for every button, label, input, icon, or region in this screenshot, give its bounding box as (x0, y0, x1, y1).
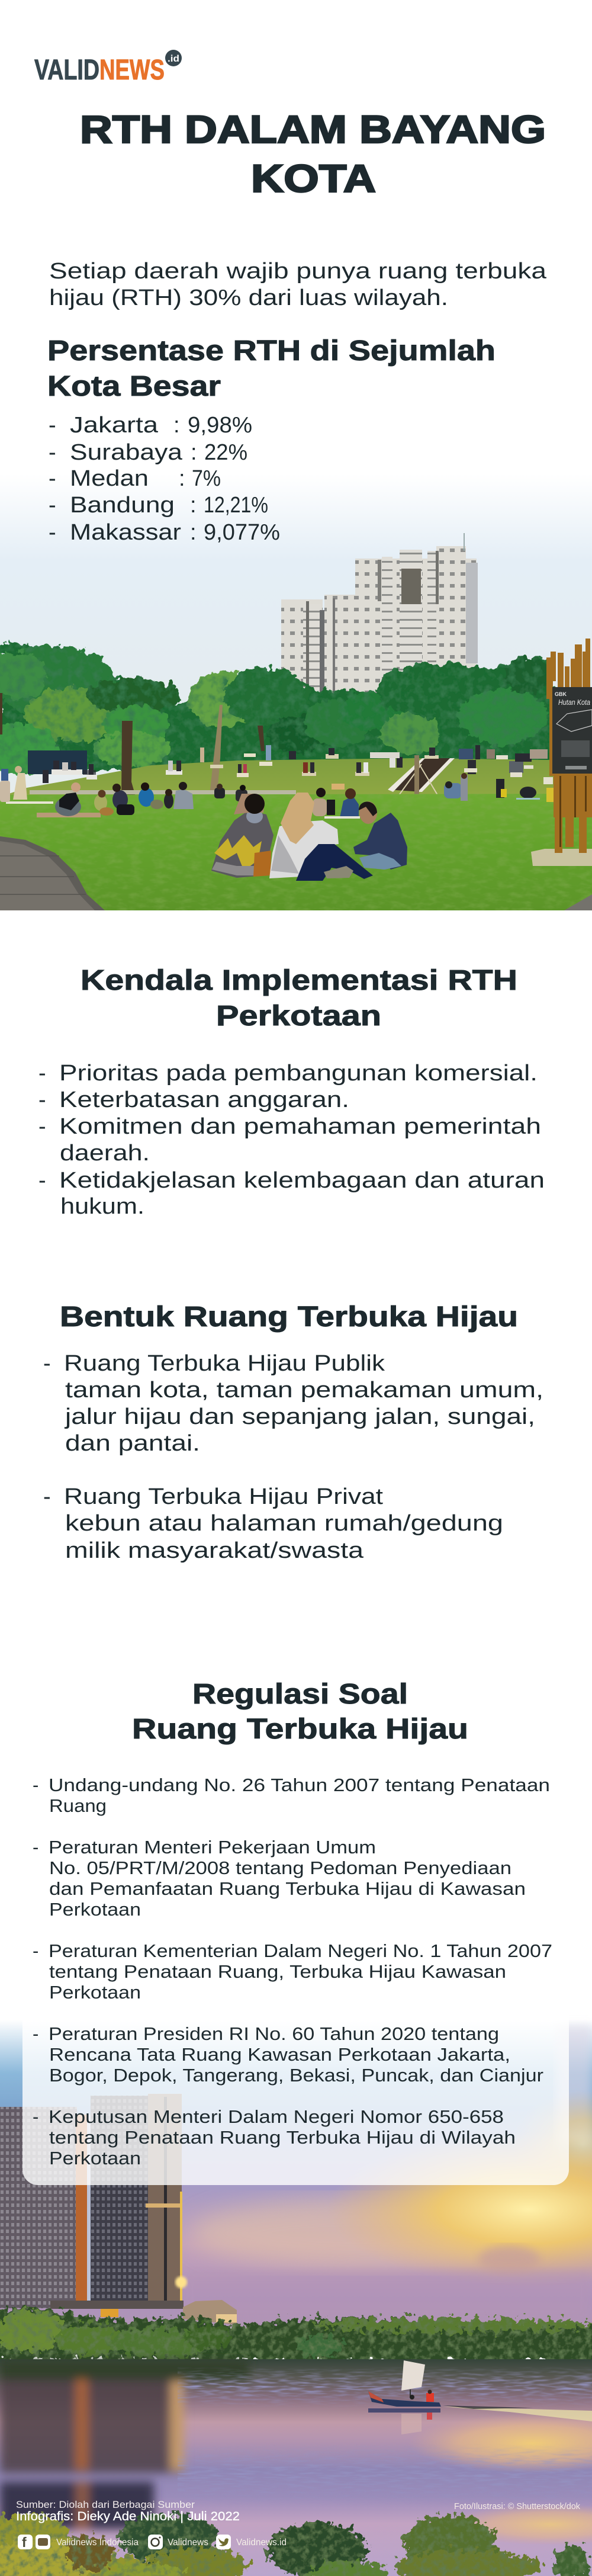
logo: Validnews.id: VALID (34, 54, 99, 86)
heading: kendala implementasi (81, 965, 517, 1032)
paved path (0, 836, 592, 910)
list: persentase RTH per kota: Jakarta (70, 413, 159, 438)
logo: Validnews.id (34, 50, 182, 86)
list: kendala: Komitmen dan pemahaman pemerintah (59, 1114, 541, 1139)
list: kendala: daerah. (60, 1141, 150, 1166)
list: bentuk RTH: milik masyarakat/swasta (65, 1538, 364, 1563)
regulation 2 (33, 1837, 526, 1920)
regulation 5 (33, 2106, 516, 2168)
source credit: Sumber: Diolah dari Berbagai Sumber (16, 2499, 195, 2510)
list: persentase RTH per kota: 9,077% (204, 520, 280, 545)
heading: kendala implementasi: Kendala Implementasi RTH (81, 965, 517, 996)
tree trunks (0, 693, 265, 803)
list: persentase RTH per kota: 7% (192, 466, 221, 491)
photo credit: Foto/Ilustrasi: © Shutterstock/dok (454, 2501, 580, 2511)
regulation 2: Peraturan Menteri Pekerjaan Umum (49, 1837, 376, 1858)
picnic group middle (313, 788, 360, 819)
city towers (281, 533, 478, 701)
list: persentase RTH per kota: : (191, 440, 197, 465)
heading: bentuk RTH: Bentuk Ruang Terbuka Hijau (60, 1301, 518, 1333)
twin towers (0, 2094, 237, 2325)
man in hoodie (353, 801, 407, 870)
people on lawn far (332, 773, 554, 802)
list: persentase RTH per kota: : (190, 493, 197, 518)
tower reflections (0, 2360, 249, 2529)
regulation 2: No. 05/PRT/M/2008 tentang Pedoman Penyediaan (49, 1858, 511, 1878)
regulation 5: Perkotaan (49, 2148, 141, 2168)
photo: sunset lake with towers (0, 2020, 592, 2576)
icon: twitter (216, 2535, 231, 2549)
heading: regulasi: Ruang Terbuka Hijau (132, 1714, 468, 1745)
regulation 4: - (33, 2023, 38, 2044)
list: kendala: - (38, 1114, 46, 1139)
lake water (0, 2359, 592, 2576)
grassy hill (0, 758, 559, 797)
title (80, 107, 546, 200)
woman in batik (211, 794, 274, 878)
logo: Validnews.id: .id (168, 54, 179, 64)
icon: instagram (148, 2535, 163, 2549)
infographic credit: Infografis: Dieky Ade Ninoki | Juli 2022 (16, 2510, 240, 2523)
icon: youtube (36, 2535, 50, 2549)
list: persentase RTH per kota: - (49, 493, 56, 518)
water glare (178, 2366, 592, 2545)
list: kendala: - (38, 1087, 46, 1112)
list: persentase RTH per kota: - (49, 413, 56, 438)
sunset sky (0, 2020, 592, 2328)
dark pavilion (28, 750, 87, 774)
panel: regulasi list (22, 1753, 569, 2185)
woman in hijab (269, 793, 373, 881)
regulation 2: Perkotaan (49, 1899, 141, 1920)
heading: persentase RTH: Persentase RTH di Sejumlah (47, 335, 496, 367)
regulation 3 (33, 1940, 552, 2003)
icon: facebook (18, 2535, 33, 2550)
regulation 1 (33, 1775, 550, 1816)
wooden sign board: GBK (555, 691, 567, 697)
heading: persentase RTH: Kota Besar (47, 371, 221, 402)
list: persentase RTH per kota: : (179, 466, 185, 491)
list: persentase RTH per kota: - (49, 466, 56, 491)
list: persentase RTH per kota: - (49, 440, 56, 465)
regulation 3: tentang Penataan Ruang, Terbuka Hijau Kawasan (49, 1961, 506, 1982)
regulation 3: Peraturan Kementerian Dalam Negeri No. 1 Tahun 2007 (49, 1940, 552, 1961)
list: bentuk RTH: Ruang Terbuka Hijau Privat (64, 1484, 384, 1509)
regulation 3: - (33, 1940, 38, 1961)
mangrove treeline (0, 2308, 592, 2363)
three seated people foreground (211, 793, 407, 881)
logo: Validnews.id: NEWS (99, 54, 165, 86)
list: bentuk RTH (43, 1351, 543, 1563)
intro text: hijau (RTH) 30% dari luas wilayah. (49, 285, 448, 310)
label: Validnews.id: Validnews.id (236, 2537, 287, 2548)
regulation 4: Rencana Tata Ruang Kawasan Perkotaan Jakarta, (49, 2044, 510, 2065)
list: kendala: - (38, 1168, 46, 1193)
regulation 2: dan Pemanfaatan Ruang Terbuka Hijau di Kawasan (49, 1878, 526, 1899)
title: KOTA (251, 156, 376, 200)
list: bentuk RTH: taman kota, taman pemakaman umum, (65, 1378, 543, 1403)
list: kendala: hukum. (60, 1194, 144, 1219)
social media row (18, 2535, 287, 2550)
regulation 1: Undang-undang No. 26 Tahun 2007 tentang Penataan (49, 1775, 550, 1795)
list: persentase RTH per kota: Medan (70, 466, 149, 491)
regulation 4: Peraturan Presiden RI No. 60 Tahun 2020 tentang (49, 2023, 499, 2044)
regulation 2: - (33, 1837, 38, 1858)
regulation 3: Perkotaan (49, 1982, 141, 2003)
foreground foliage (0, 2511, 589, 2576)
list: bentuk RTH: Ruang Terbuka Hijau Publik (64, 1351, 385, 1376)
list: persentase RTH per kota: Surabaya (70, 440, 183, 465)
list: kendala: - (38, 1061, 46, 1086)
heading: regulasi: Regulasi Soal (192, 1679, 408, 1710)
list: bentuk RTH: kebun atau halaman rumah/gedung (65, 1511, 503, 1536)
trees background (0, 641, 556, 774)
regulation 5: tentang Penataan Ruang Terbuka Hijau di Wilayah (49, 2127, 516, 2148)
lawn (0, 794, 592, 910)
wooden sign board (531, 639, 592, 866)
regulation 4 (33, 2023, 543, 2086)
list: persentase RTH per kota: : (173, 413, 180, 438)
list: persentase RTH per kota: - (49, 520, 56, 545)
photo: park with high-rise towers (0, 474, 592, 910)
picnic group left (0, 766, 247, 817)
list: bentuk RTH: - (43, 1484, 51, 1509)
regulation 5: Keputusan Menteri Dalam Negeri Nomor 650-658 (49, 2106, 504, 2127)
regulation 5: - (33, 2106, 38, 2127)
list: kendala (38, 1061, 545, 1219)
heading: regulasi (132, 1679, 468, 1745)
icon: facebook: f (22, 2535, 27, 2550)
intro text: Setiap daerah wajib punya ruang terbuka (49, 259, 547, 284)
regulation 4: Bogor, Depok, Tangerang, Bekasi, Puncak, dan Cianjur (49, 2065, 543, 2086)
regulation 1: Ruang (49, 1795, 107, 1816)
list: persentase RTH per kota: 22% (204, 440, 247, 465)
regulation 1: - (33, 1775, 38, 1795)
walkway strip (30, 790, 296, 794)
boat with sail (368, 2360, 592, 2434)
list: persentase RTH per kota (49, 413, 280, 545)
list: kendala: Keterbatasan anggaran. (59, 1087, 349, 1112)
title: RTH DALAM BAYANG (80, 107, 546, 151)
list: bentuk RTH: - (43, 1351, 51, 1376)
list: kendala: Ketidakjelasan kelembagaan dan aturan (59, 1168, 545, 1193)
people on hill (43, 745, 553, 784)
heading: kendala implementasi: Perkotaan (216, 1000, 381, 1032)
list: persentase RTH per kota: Bandung (70, 493, 175, 518)
list: persentase RTH per kota: Makassar (70, 520, 181, 545)
heading: persentase RTH (47, 335, 496, 402)
label: Validnews: Validnews (168, 2537, 208, 2548)
list: kendala: Prioritas pada pembangunan komersial. (59, 1061, 538, 1086)
list: bentuk RTH: dan pantai. (65, 1431, 200, 1456)
list: bentuk RTH: jalur hijau dan sepanjang jalan, sungai, (65, 1404, 535, 1429)
intro text (49, 259, 547, 310)
list: persentase RTH per kota: 12,21% (204, 493, 268, 518)
tunnel entrance (388, 755, 455, 798)
list: persentase RTH per kota: : (190, 520, 197, 545)
list: persentase RTH per kota: 9,98% (188, 413, 252, 438)
label: Validnews Indonesia: Validnews Indonesia (56, 2537, 139, 2548)
